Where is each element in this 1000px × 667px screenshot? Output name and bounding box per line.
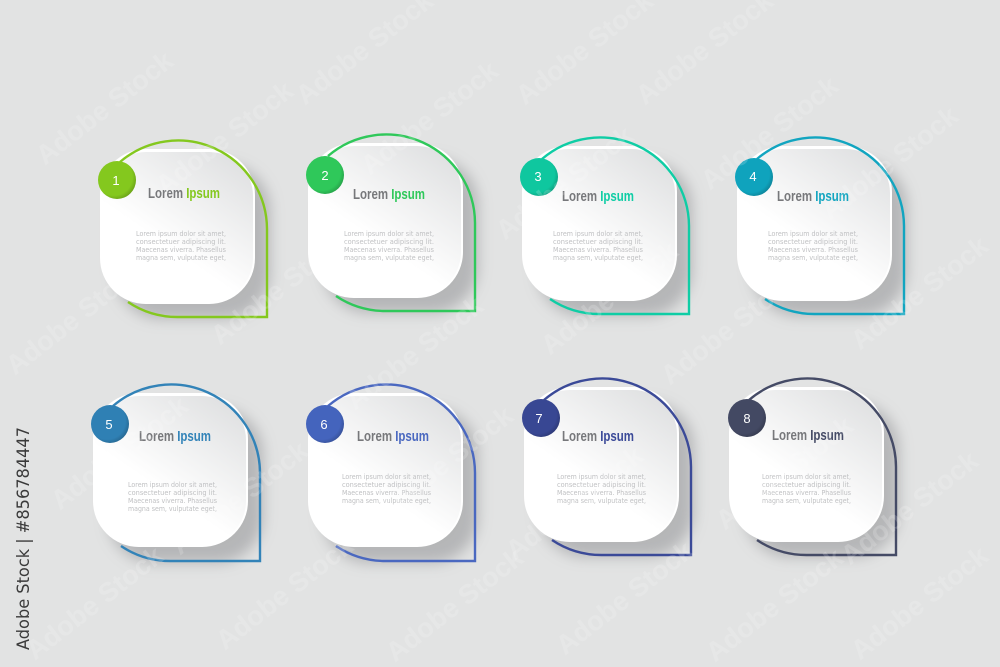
panel: step 3: [520, 138, 692, 316]
drop shadow: [115, 164, 270, 319]
number badge: [91, 405, 129, 443]
heading: Lorem Ipsum: [139, 429, 211, 445]
body text: Maecenas viverra. Phasellus: [344, 246, 434, 254]
body text: magna sem, vulputate eget,: [128, 505, 217, 513]
number badge: 6: [320, 417, 328, 432]
watermark pattern: Adobe Stock: [355, 55, 504, 181]
white card: [93, 393, 248, 547]
panel: step 2: [306, 135, 478, 313]
drop shadow: [323, 158, 478, 313]
number badge: [735, 158, 773, 196]
heading: Lorem Ipsum: [357, 429, 429, 445]
heading: Lorem Ipsum: [148, 186, 220, 202]
number badge: [98, 161, 136, 199]
outline: [544, 379, 691, 555]
drop shadow: [323, 408, 478, 563]
body text: Lorem ipsum dolor sit amet,: [344, 230, 434, 238]
body text: Maecenas viverra. Phasellus: [768, 246, 858, 254]
number badge: 4: [749, 169, 757, 184]
body text: [128, 481, 217, 513]
body text: consectetuer adipiscing lit.: [128, 489, 217, 497]
panel: step 5: [91, 385, 263, 563]
body text: consectetuer adipiscing lit.: [768, 238, 858, 246]
number badge: [306, 156, 344, 194]
number badge: [520, 158, 558, 196]
body text: [762, 473, 851, 505]
body text: Maecenas viverra. Phasellus: [553, 246, 643, 254]
watermark pattern: Adobe Stock: [340, 290, 489, 416]
white card: [308, 143, 463, 298]
outline: [757, 138, 904, 314]
number badge: 8: [743, 411, 751, 426]
body text: Lorem ipsum dolor sit amet,: [553, 230, 643, 238]
heading: Lorem Ipsum: [772, 428, 844, 444]
drop shadow: [539, 402, 694, 557]
body text: [136, 230, 226, 262]
watermark pattern: Adobe Stock: [20, 540, 169, 666]
white card: [737, 146, 892, 301]
watermark pattern: Adobe Stock: [500, 440, 649, 566]
outline: [120, 141, 267, 317]
watermark pattern: Adobe Stock: [845, 540, 994, 666]
body text: magna sem, vulputate eget,: [136, 254, 226, 262]
body text: Lorem ipsum dolor sit amet,: [128, 481, 217, 489]
number badge: [728, 399, 766, 437]
body text: Maecenas viverra. Phasellus: [557, 489, 646, 497]
watermark pattern: Adobe Stock: [710, 410, 859, 536]
number badge: 5: [105, 417, 113, 432]
body text: [768, 230, 858, 262]
white card: [729, 387, 884, 542]
body text: Lorem ipsum dolor sit amet,: [136, 230, 226, 238]
body text: consectetuer adipiscing lit.: [342, 481, 431, 489]
outline: [328, 135, 475, 311]
watermark pattern: Adobe Stock: [165, 435, 314, 561]
outline: [328, 385, 475, 561]
body text: consectetuer adipiscing lit.: [344, 238, 434, 246]
body text: [342, 473, 431, 505]
body text: Lorem ipsum dolor sit amet,: [762, 473, 851, 481]
watermark pattern: Adobe Stock: [380, 542, 529, 667]
white card: [524, 387, 679, 542]
body text: Maecenas viverra. Phasellus: [128, 497, 217, 505]
body text: consectetuer adipiscing lit.: [762, 481, 851, 489]
number badge: [306, 405, 344, 443]
drop shadow: [744, 402, 899, 557]
number badge: 1: [112, 173, 120, 188]
body text: Maecenas viverra. Phasellus: [762, 489, 851, 497]
watermark pattern: Adobe Stock: [535, 235, 684, 361]
body text: consectetuer adipiscing lit.: [136, 238, 226, 246]
stock id caption: Adobe Stock | #856784447: [14, 427, 34, 650]
body text: [344, 230, 434, 262]
watermark pattern: Adobe Stock: [205, 225, 354, 351]
body text: magna sem, vulputate eget,: [762, 497, 851, 505]
watermark pattern: Adobe Stock: [210, 530, 359, 656]
watermark pattern: Adobe Stock: [490, 120, 639, 246]
panel: step 6: [306, 385, 478, 563]
heading: Lorem Ipsum: [562, 189, 634, 205]
heading: Lorem Ipsum: [353, 187, 425, 203]
watermark pattern: Adobe Stock: [370, 400, 519, 526]
panel: step 4: [735, 138, 907, 316]
watermark pattern: Adobe Stock: [0, 255, 149, 381]
body text: magna sem, vulputate eget,: [768, 254, 858, 262]
watermark pattern: Adobe Stock: [700, 542, 849, 667]
body text: magna sem, vulputate eget,: [342, 497, 431, 505]
drop shadow: [752, 161, 907, 316]
body text: magna sem, vulputate eget,: [553, 254, 643, 262]
number badge: 2: [321, 168, 329, 183]
body text: consectetuer adipiscing lit.: [553, 238, 643, 246]
number badge: 3: [534, 169, 542, 184]
outline: [113, 385, 260, 561]
number badge: 7: [535, 411, 543, 426]
white card: [522, 146, 677, 301]
panel: step 1: [98, 141, 270, 319]
panel: step 7: [522, 379, 694, 557]
body text: magna sem, vulputate eget,: [344, 254, 434, 262]
white card: [100, 149, 255, 304]
heading: Lorem Ipsum: [562, 429, 634, 445]
drop shadow: [537, 161, 692, 316]
watermark pattern: Adobe Stock: [550, 535, 699, 661]
watermark pattern: Adobe Stock: [30, 45, 179, 171]
outline: [542, 138, 689, 314]
outline: [749, 379, 896, 555]
watermark pattern: Adobe Stock: [845, 230, 994, 356]
drop shadow: [108, 408, 263, 563]
body text: Lorem ipsum dolor sit amet,: [557, 473, 646, 481]
body text: [557, 473, 646, 505]
body text: Maecenas viverra. Phasellus: [136, 246, 226, 254]
watermark pattern: Adobe Stock: [655, 265, 804, 391]
watermark pattern: Adobe Stock: [815, 100, 964, 226]
body text: Maecenas viverra. Phasellus: [342, 489, 431, 497]
body text: Lorem ipsum dolor sit amet,: [768, 230, 858, 238]
watermark pattern: Adobe Stock: [45, 390, 194, 516]
watermark pattern: Adobe Stock: [150, 75, 299, 201]
body text: Lorem ipsum dolor sit amet,: [342, 473, 431, 481]
body text: consectetuer adipiscing lit.: [557, 481, 646, 489]
body text: [553, 230, 643, 262]
watermark pattern: Adobe Stock: [695, 70, 844, 196]
number badge: [522, 399, 560, 437]
panel: step 8: [728, 379, 899, 557]
body text: magna sem, vulputate eget,: [557, 497, 646, 505]
white card: [308, 393, 463, 547]
watermark pattern: Adobe Stock: [835, 445, 984, 571]
heading: Lorem Ipsum: [777, 189, 849, 205]
